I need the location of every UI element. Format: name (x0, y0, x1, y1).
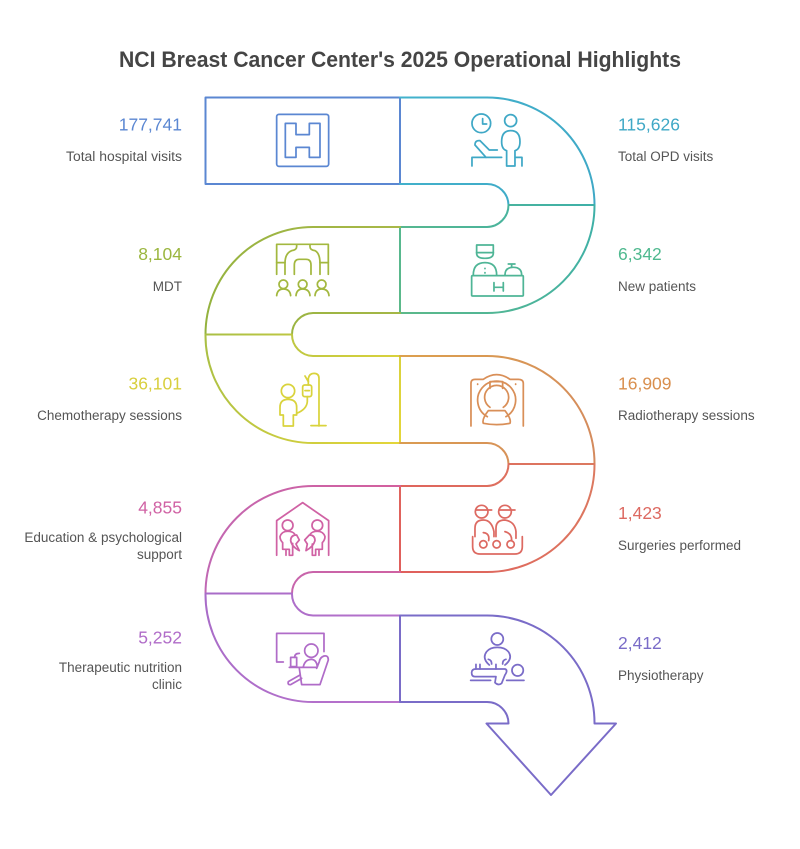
stat: education and psychological support: Education & psychological (24, 530, 182, 545)
stat: therapeutic nutrition clinic (59, 628, 182, 692)
stat: education and psychological support (24, 498, 182, 562)
icon: physiotherapy massage (471, 633, 524, 685)
stat: surgeries performed (618, 503, 741, 553)
flow segment: surgeries (400, 464, 595, 572)
stat: MDT: 8,104 (138, 244, 182, 264)
arrow segment: physiotherapy (400, 616, 616, 795)
stat: chemotherapy sessions: Chemotherapy sessions (37, 408, 182, 423)
stat: physiotherapy: 2,412 (618, 633, 662, 653)
flow segment: therapeutic nutrition (205, 594, 400, 702)
stat: total hospital visits: Total hospital visits (66, 149, 182, 164)
stat: surgeries performed: 1,423 (618, 503, 662, 523)
stat: therapeutic nutrition clinic: 5,252 (138, 628, 182, 648)
icon: multidisciplinary team (277, 244, 329, 296)
icon: chemotherapy drip (280, 373, 326, 426)
flow segment: total hospital visits (206, 98, 400, 184)
stat: education and psychological support: 4,855 (138, 498, 182, 518)
stat: physiotherapy: Physiotherapy (618, 668, 704, 683)
stat: new patients (618, 244, 696, 294)
flow segment: radiotherapy (400, 356, 595, 464)
stat: education and psychological support: support (137, 547, 182, 562)
stat: total OPD visits: Total OPD visits (618, 149, 714, 164)
stat: MDT: MDT (153, 279, 182, 294)
stat: total OPD visits (618, 114, 714, 164)
stat: radiotherapy sessions (618, 374, 755, 423)
stat: therapeutic nutrition clinic: clinic (152, 677, 182, 692)
stat: chemotherapy sessions: 36,101 (128, 374, 182, 394)
stat: chemotherapy sessions (37, 374, 182, 423)
flow segment: chemotherapy (205, 334, 400, 443)
flow segment: MDT (206, 227, 400, 334)
flow segment: total OPD visits (400, 98, 594, 205)
stat: radiotherapy sessions: 16,909 (618, 374, 672, 394)
stat: total hospital visits (66, 114, 182, 164)
icon: radiotherapy scanner (471, 375, 523, 426)
stat: new patients: 6,342 (618, 244, 662, 264)
stat: MDT (138, 244, 182, 294)
stat: therapeutic nutrition clinic: Therapeutic nutrition (59, 660, 182, 675)
flow segment: new patients (400, 205, 595, 313)
icon: reception with bell (472, 245, 523, 296)
icon: hospital H sign (277, 114, 329, 166)
stat: total OPD visits: 115,626 (618, 114, 680, 134)
icon: surgeons at operating table (473, 505, 522, 554)
icon: family in house with broken heart (277, 503, 329, 555)
title: NCI Breast Cancer Center's 2025 Operational Highlights (119, 47, 681, 72)
stat: new patients: New patients (618, 279, 696, 294)
stat: radiotherapy sessions: Radiotherapy sessions (618, 408, 755, 423)
stat: physiotherapy (618, 633, 704, 683)
stat: surgeries performed: Surgeries performed (618, 538, 741, 553)
icon: outpatient clock and person (472, 114, 522, 166)
flow segment: education and psychological support (206, 486, 400, 594)
stat: total hospital visits: 177,741 (119, 114, 182, 134)
icon: nutrition clinic (277, 633, 328, 685)
